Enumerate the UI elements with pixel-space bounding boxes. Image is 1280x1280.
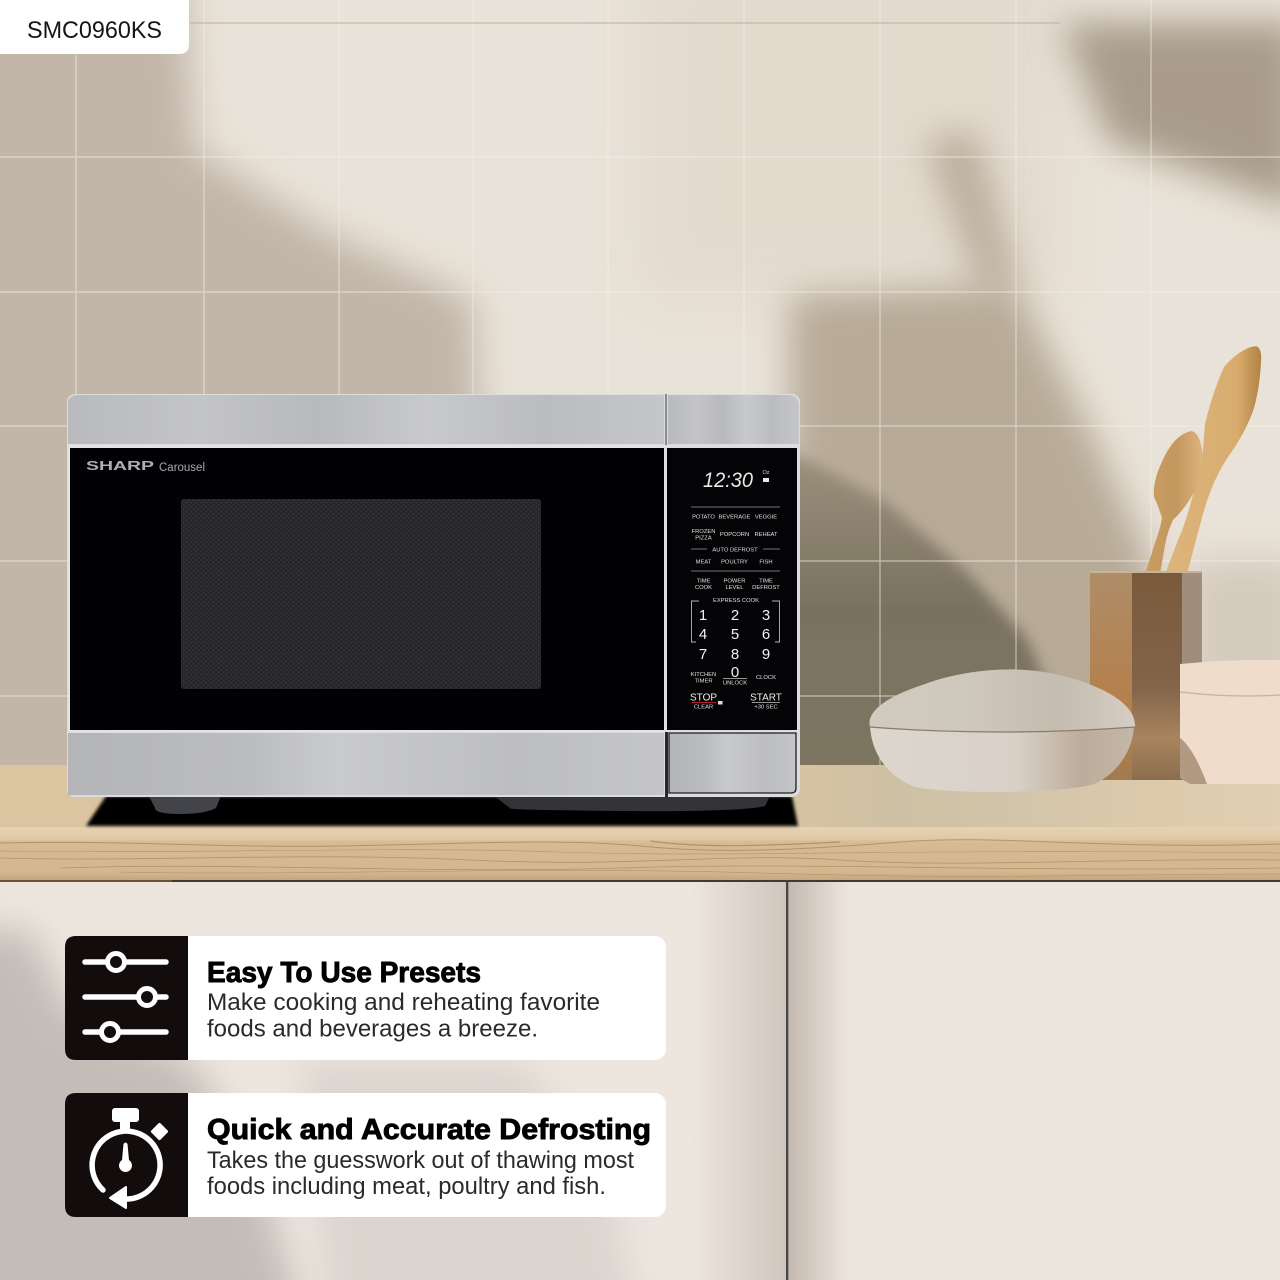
number keypad: 3 (762, 607, 770, 624)
number keypad: 1 (699, 607, 707, 624)
bottom steel band (68, 733, 664, 795)
number keypad: 2 (731, 607, 739, 624)
description: foods and beverages a breeze. (207, 1016, 538, 1042)
number keypad (699, 607, 770, 681)
round lidded dish (869, 669, 1135, 792)
description: Takes the guesswork out of thawing most (207, 1147, 634, 1174)
cream canister (1180, 660, 1280, 784)
preset labels: COOK (695, 585, 712, 591)
lower buttons: STOP (690, 692, 717, 704)
preset labels: POPCORN (720, 532, 749, 538)
brand logo: Carousel (159, 462, 205, 474)
number keypad: 9 (762, 646, 770, 663)
description (207, 1147, 634, 1200)
feature card: presets (65, 936, 666, 1060)
control panel top (668, 395, 799, 444)
number keypad: 8 (731, 646, 739, 663)
tile grout (0, 0, 1280, 768)
preset labels: MEAT (696, 560, 712, 566)
preset labels: FISH (759, 560, 773, 566)
preset labels: BEVERAGE (719, 514, 751, 520)
heading: Easy To Use Presets (207, 957, 481, 989)
lower buttons: KITCHEN (691, 672, 716, 678)
preset labels: PIZZA (695, 536, 712, 542)
brand logo (86, 458, 205, 474)
lower buttons: START (750, 692, 782, 704)
control panel (665, 445, 799, 732)
top steel band (68, 395, 664, 444)
preset labels: POULTRY (721, 560, 748, 566)
wooden spoons (1145, 346, 1261, 574)
door glass (68, 445, 665, 732)
cabinet doors (0, 878, 1280, 1280)
icon: sliders (65, 936, 188, 1060)
clock display: Oz (762, 470, 770, 476)
small spoon (1145, 431, 1202, 574)
utensil holder (1090, 571, 1202, 780)
clock display: 12:30 (703, 469, 753, 492)
icon: stopwatch (65, 1093, 188, 1217)
preset labels: TIME (759, 578, 773, 584)
microwave (67, 394, 800, 814)
number keypad: 6 (762, 626, 770, 643)
number keypad: 0 (731, 664, 739, 681)
lower buttons: UNLOCK (723, 680, 747, 686)
heading: Quick and Accurate Defrosting (207, 1114, 651, 1146)
brand logo: SHARP (86, 458, 154, 473)
lower buttons: +30 SEC (754, 704, 778, 710)
wooden countertop (0, 765, 1280, 880)
description: foods including meat, poultry and fish. (207, 1173, 606, 1200)
preset labels: POTATO (692, 514, 715, 520)
preset labels: REHEAT (754, 532, 778, 538)
steel body (67, 394, 800, 797)
door window mesh (181, 499, 541, 689)
number keypad: 4 (699, 626, 707, 643)
number keypad: 5 (731, 626, 739, 643)
preset labels (692, 514, 780, 604)
lower buttons: TIMER (694, 678, 713, 684)
model tag (0, 0, 189, 54)
preset labels: POWER (724, 578, 745, 584)
lower buttons: CLOCK (756, 675, 776, 681)
description (207, 989, 600, 1042)
preset labels: AUTO DEFROST (712, 548, 758, 554)
model tag: SMC0960KS (27, 17, 162, 44)
preset labels: LEVEL (725, 585, 744, 591)
microwave feet (149, 796, 770, 814)
lower buttons (690, 672, 782, 710)
feature card: defrosting (65, 1093, 666, 1217)
preset labels: EXPRESS COOK (713, 598, 759, 604)
microwave counter shadow (86, 796, 798, 826)
large spoon (1165, 346, 1261, 574)
description: Make cooking and reheating favorite (207, 989, 600, 1016)
number keypad: 7 (699, 646, 707, 663)
preset labels: TIME (697, 578, 711, 584)
door opening panel (669, 733, 796, 793)
preset labels: VEGGIE (755, 514, 777, 520)
preset labels: FROZEN (692, 529, 715, 535)
preset labels: DEFROST (752, 585, 780, 591)
tiled kitchen wall (0, 0, 1280, 820)
lower buttons: CLEAR (694, 704, 713, 710)
